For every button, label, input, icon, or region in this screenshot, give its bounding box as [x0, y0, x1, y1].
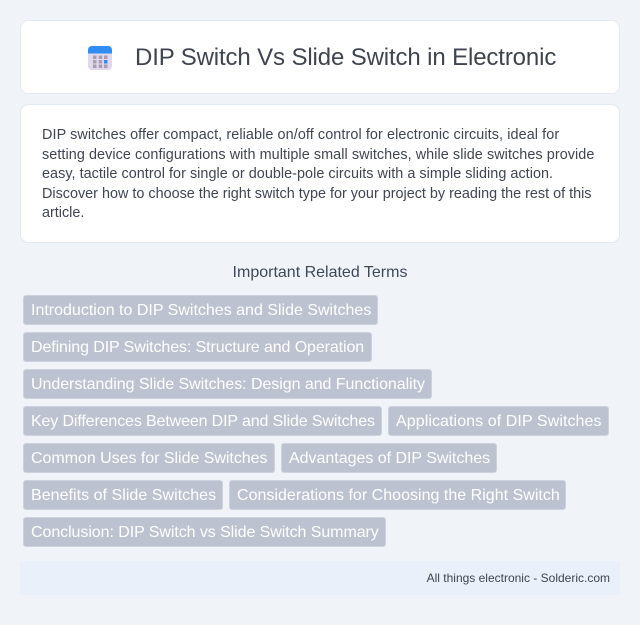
- tag: Applications of DIP Switches: [396, 413, 602, 430]
- tag: [23, 369, 432, 399]
- tag: [23, 517, 386, 547]
- tag: [23, 295, 378, 325]
- tag: [388, 406, 609, 436]
- intro paragraph: DIP switches offer compact, reliable on/off control for electronic circuits, ideal for: [42, 127, 559, 143]
- title: DIP Switch Vs Slide Switch in Electronic: [135, 44, 556, 71]
- footer credit: All things electronic - Solderic.com: [427, 571, 610, 585]
- tag: Defining DIP Switches: Structure and Operation: [31, 339, 364, 356]
- tag: [281, 443, 497, 473]
- tag: Key Differences Between DIP and Slide Switches: [31, 413, 375, 430]
- heading: important related terms: Important Related Terms: [233, 264, 407, 281]
- intro paragraph: [42, 127, 594, 221]
- tag: Common Uses for Slide Switches: [31, 450, 268, 467]
- panel: intro text card: [20, 104, 620, 243]
- intro paragraph: Discover how to choose the right switch type for your project by reading the rest of this: [42, 186, 592, 202]
- intro paragraph: article.: [42, 205, 84, 221]
- tag: [23, 443, 275, 473]
- icon: calendar grid: [88, 46, 112, 70]
- tag: Advantages of DIP Switches: [289, 450, 490, 467]
- tag: [23, 406, 382, 436]
- tag: Introduction to DIP Switches and Slide Switches: [31, 302, 371, 319]
- tag: Benefits of Slide Switches: [31, 487, 216, 504]
- panel: title card: [20, 20, 620, 94]
- intro paragraph: setting device configurations with multiple small switches, while slide switches provide: [42, 147, 594, 163]
- footer bar: [20, 561, 620, 595]
- tag: [23, 480, 223, 510]
- tag: Considerations for Choosing the Right Switch: [237, 487, 560, 504]
- tag: [229, 480, 566, 510]
- intro paragraph: easy, tactile control for single or double-pole circuits with a simple sliding action.: [42, 166, 553, 182]
- tag: Understanding Slide Switches: Design and Functionality: [31, 376, 425, 393]
- tag: Conclusion: DIP Switch vs Slide Switch Summary: [31, 524, 379, 541]
- related terms tag list: [23, 295, 609, 547]
- tag: [23, 332, 372, 362]
